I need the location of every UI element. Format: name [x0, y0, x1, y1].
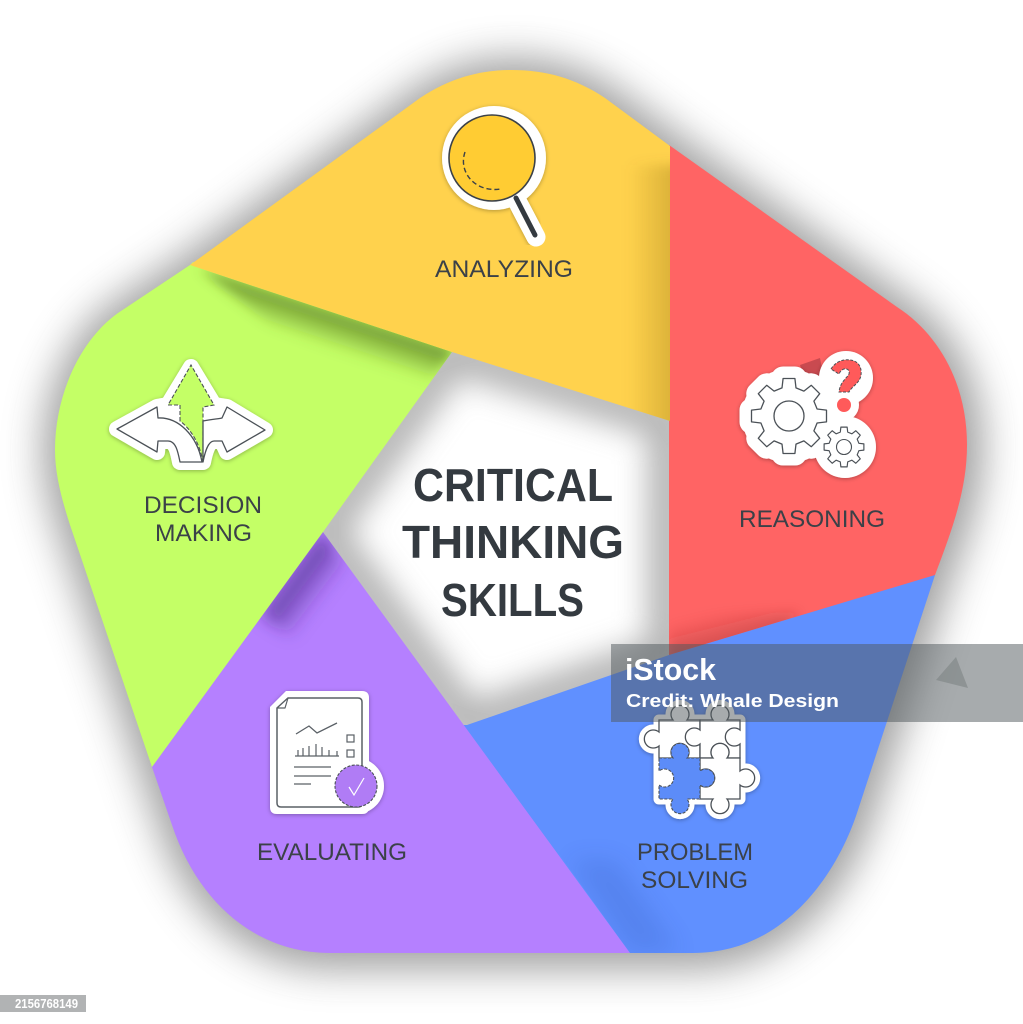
image id tag	[0, 995, 86, 1012]
label: decision making	[144, 492, 262, 547]
icon: magnifying glass	[442, 106, 546, 237]
panel: center	[315, 345, 675, 732]
watermark band	[611, 644, 1023, 722]
watermark credit: Credit: Whale Design	[626, 690, 839, 711]
title: SKILLS	[441, 574, 584, 626]
panel: evaluating	[152, 532, 630, 953]
panel: decision making	[55, 262, 455, 775]
title: CRITICAL	[413, 459, 613, 511]
watermark brand: iStock	[625, 652, 717, 687]
title: THINKING	[402, 516, 624, 568]
label: decision making: DECISION	[144, 492, 262, 519]
icon: puzzle	[644, 705, 755, 814]
label: evaluating: EVALUATING	[257, 839, 407, 866]
label: problem solving: PROBLEM	[637, 839, 753, 866]
icon: gears and question mark	[742, 351, 876, 478]
pentagon drop shadow	[57, 72, 969, 955]
label: analyzing: ANALYZING	[435, 256, 573, 283]
label: reasoning: REASONING	[739, 506, 885, 533]
label: problem solving	[637, 839, 753, 894]
title	[402, 459, 624, 626]
icon: three way arrows	[117, 365, 265, 462]
panel: problem solving	[460, 575, 935, 953]
label: problem solving: SOLVING	[641, 867, 748, 894]
panel: reasoning	[669, 145, 967, 665]
image id tag: 2156768149	[15, 997, 78, 1011]
panel: analyzing	[190, 70, 688, 435]
icon: report document	[270, 691, 384, 814]
label: decision making: MAKING	[155, 520, 252, 547]
